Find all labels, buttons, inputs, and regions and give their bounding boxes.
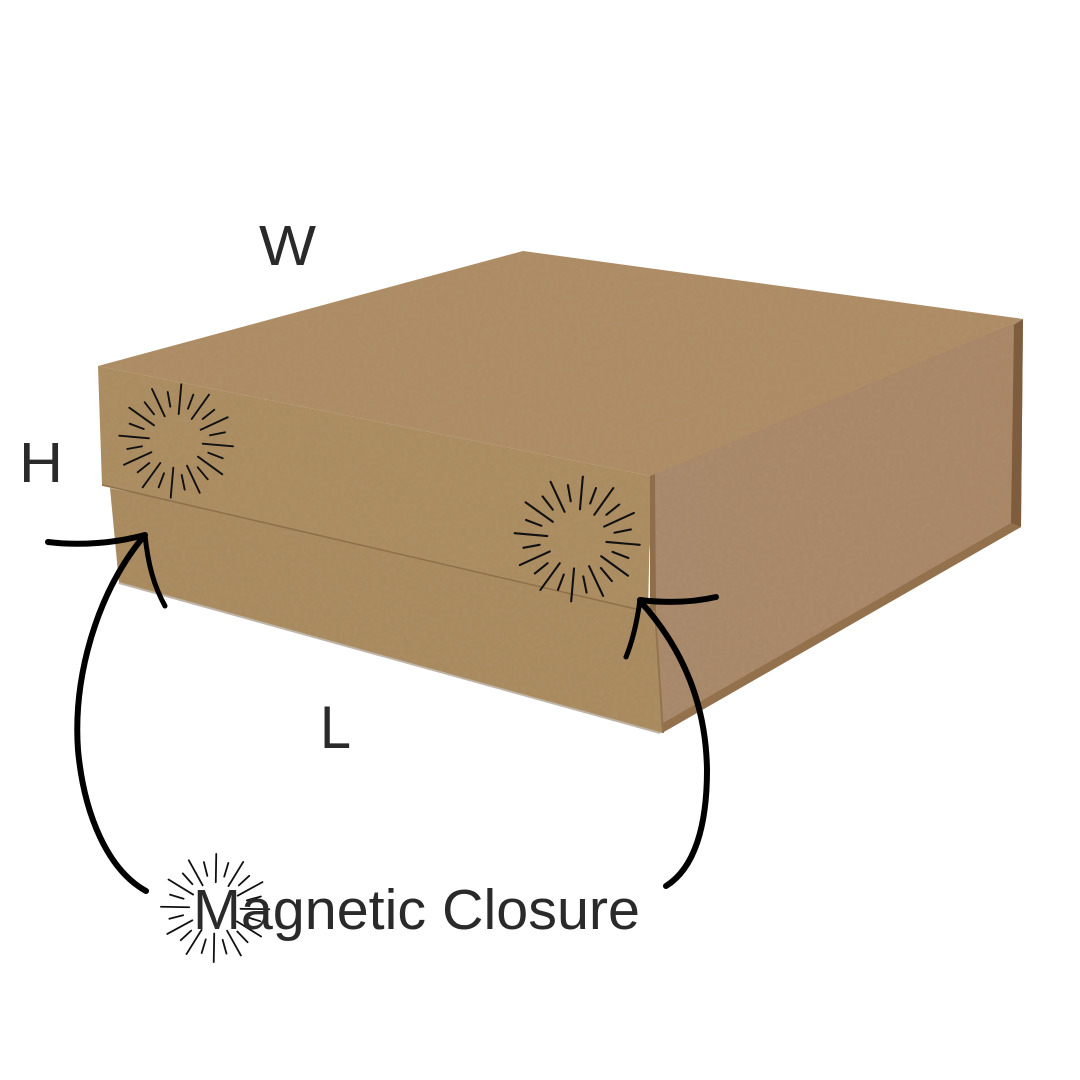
base shadow line: [119, 583, 660, 733]
box base front panel: [110, 488, 662, 733]
gift box: [98, 251, 1023, 733]
box right side panel: [645, 319, 1023, 733]
box bottom tray edge: [662, 523, 1021, 733]
box lid front flap: [98, 366, 651, 613]
box lid top: [98, 251, 1023, 476]
lid corner dark strip: [650, 474, 656, 612]
arrow: left magnet: [48, 535, 165, 891]
base corner edge: [655, 610, 663, 733]
lid shadow edge: [102, 485, 636, 609]
icon: magnet burst by label: [158, 850, 273, 965]
box spine inner strip: [1011, 319, 1023, 527]
label: width: W: [259, 214, 316, 278]
label: length: L: [320, 694, 351, 761]
label: magnetic closure: Magnetic Closure: [193, 878, 640, 942]
label: height: H: [19, 431, 63, 495]
icon: magnet burst left: [119, 384, 233, 498]
arrow: right magnet: [626, 597, 716, 886]
icon: magnet burst right: [515, 477, 640, 601]
